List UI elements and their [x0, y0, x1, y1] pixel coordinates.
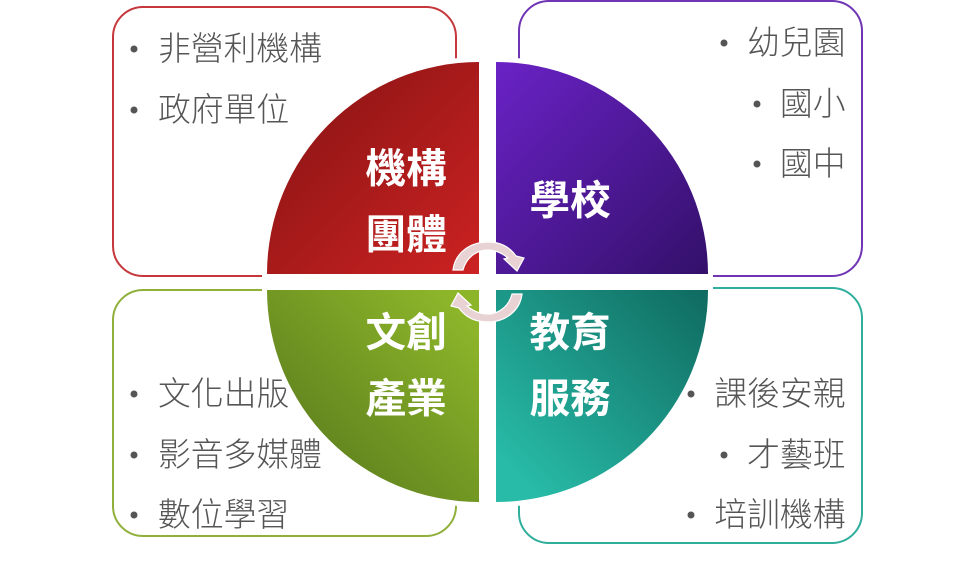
text: 國小: 國小 — [780, 85, 846, 122]
quadrant: 學校 — [496, 62, 708, 274]
text: 才藝班: 才藝班 — [747, 436, 846, 473]
label: 服務: 服務 — [530, 376, 611, 422]
quadrant: 教育服務 — [496, 290, 708, 502]
text: 文化出版: 文化出版 — [158, 375, 289, 412]
label: 產業: 產業 — [366, 376, 447, 422]
quadrant: 文創產業 — [267, 290, 479, 502]
text: 培訓機構: 培訓機構 — [714, 496, 846, 533]
label: 教育: 教育 — [530, 310, 611, 356]
text: 影音多媒體: 影音多媒體 — [158, 436, 322, 473]
panel: 機構團體 list box — [113, 7, 456, 276]
panel: 學校 list box — [519, 1, 862, 276]
quadrant: 機構團體 — [267, 62, 479, 274]
label: 文創: 文創 — [366, 310, 447, 356]
text: 政府單位: 政府單位 — [158, 91, 289, 128]
text: 幼兒園: 幼兒園 — [747, 24, 846, 61]
text: 非營利機構: 非營利機構 — [158, 30, 322, 67]
text: 數位學習: 數位學習 — [158, 496, 289, 533]
panel: 文創產業 list box — [113, 290, 456, 536]
text: 國中: 國中 — [780, 145, 846, 182]
text: 課後安親: 課後安親 — [714, 375, 846, 412]
label: 學校: 學校 — [530, 178, 611, 224]
arrow: top clockwise — [453, 242, 524, 271]
label: 團體: 團體 — [366, 212, 447, 258]
panel: 教育服務 list box — [519, 288, 862, 543]
label: 機構: 機構 — [366, 146, 447, 192]
arrow: bottom clockwise — [451, 293, 522, 322]
